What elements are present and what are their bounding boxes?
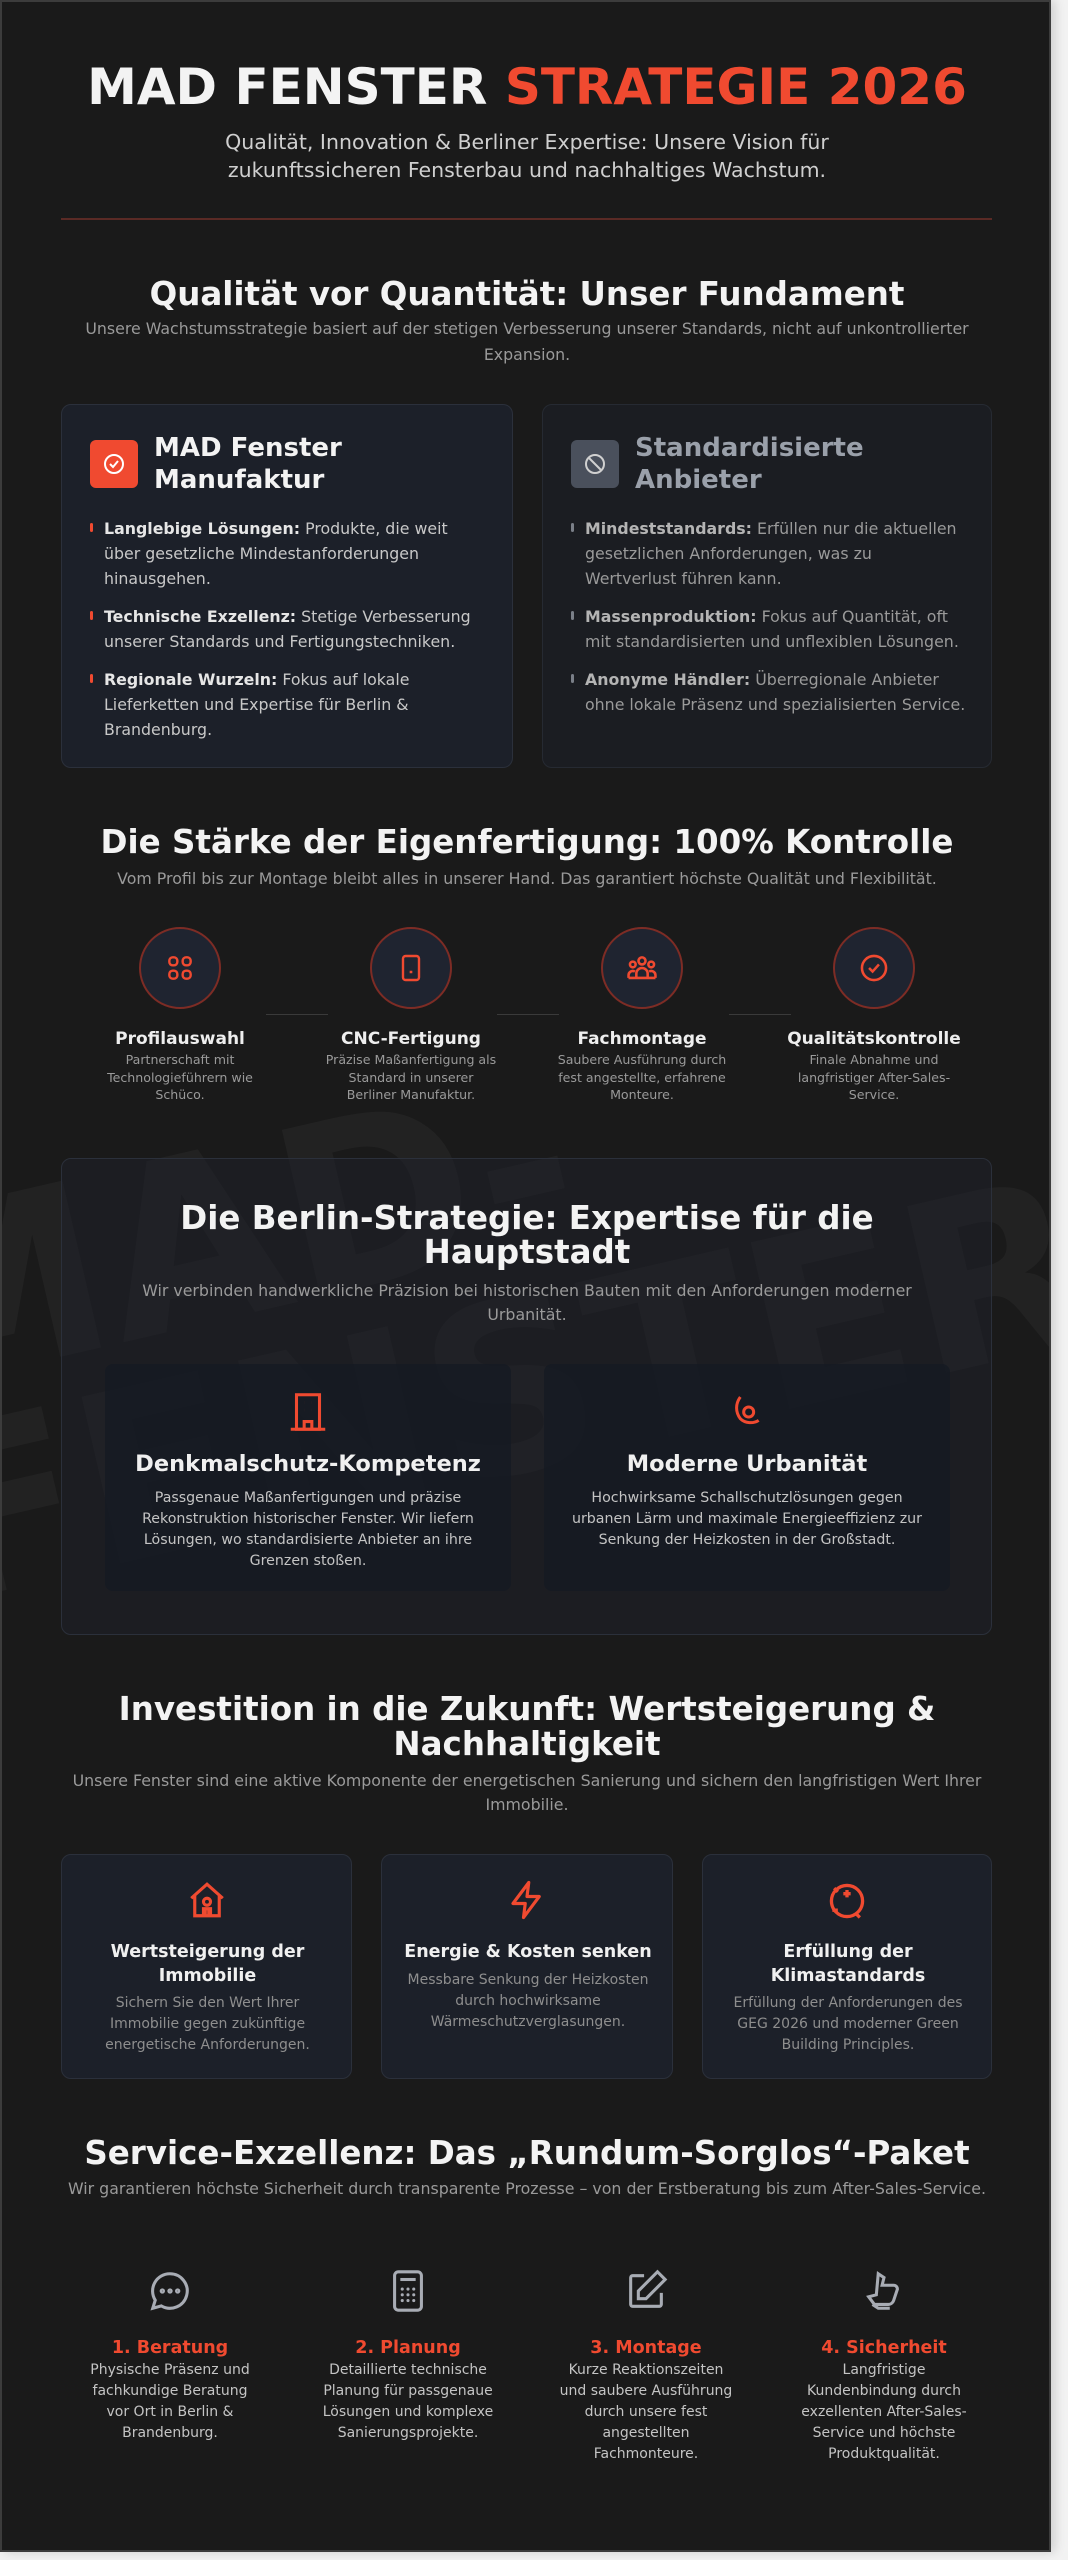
card: Moderne Urbanität <box>544 1364 950 1591</box>
bullets: Mindeststandards: Erfüllen nur die aktuellen gesetzlichen Anforderungen, was zu Wertverlust führen kann. <box>585 519 957 588</box>
card title: Anbieter <box>635 465 762 495</box>
step: Fachmontage: Saubere Ausführung durch fest angestellte, erfahrene Monteure. <box>558 1052 726 1102</box>
bullets: Anonyme Händler: Überregionale Anbieter ohne lokale Präsenz und spezialisierten Service. <box>585 670 965 714</box>
panel: MAD Fenster Manufaktur <box>61 404 513 768</box>
card title <box>154 433 342 495</box>
bullets <box>571 519 965 714</box>
icon: bolt <box>511 1880 541 1920</box>
text: section 2 intro: Vom Profil bis zur Montage bleibt alles in unserer Hand. Das garantiert höchste Qualität und Flexibilität. <box>117 869 937 888</box>
service: Montage <box>560 2270 732 2462</box>
bullets: Langlebige Lösungen: Produkte, die weit über gesetzliche Mindestanforderungen hinausgehen. <box>104 519 448 588</box>
step: Profilauswahl <box>107 927 253 1102</box>
title: MAD FENSTER STRATEGIE 2026 <box>87 58 967 116</box>
card: Wertsteigerung <box>61 1854 352 2079</box>
step: CNC-Fertigung <box>326 927 496 1102</box>
step: Profilauswahl: Profilauswahl <box>115 1029 245 1049</box>
panel: Berlin-Strategie <box>61 1158 992 1635</box>
step: Qualitätskontrolle: Qualitätskontrolle <box>787 1029 961 1049</box>
step: Profilauswahl: Partnerschaft mit Technologieführern wie Schüco. <box>107 1052 253 1102</box>
panel: Standardisierte Anbieter <box>542 404 992 768</box>
icon: chat <box>150 2272 189 2310</box>
heading: Qualität vor Quantität: Qualität vor Quantität: Unser Fundament <box>150 275 904 313</box>
icon: hand <box>866 2271 899 2310</box>
step: CNC-Fertigung: Präzise Maßanfertigung als Standard in unserer Berliner Manufaktur. <box>326 1052 496 1102</box>
icon: house <box>190 1882 224 1918</box>
card title: Standardisierte <box>635 433 864 463</box>
card: Klimastandards <box>702 1854 992 2079</box>
service: Montage: 3. Montage <box>590 2338 702 2358</box>
step: CNC-Fertigung: CNC-Fertigung <box>341 1029 481 1049</box>
icon: edit <box>629 2270 668 2308</box>
heading: Investition: Investition in die Zukunft: Wertsteigerung & Nachhaltigkeit <box>119 1690 935 1763</box>
service: Sicherheit: 4. Sicherheit <box>821 2338 947 2358</box>
service: Beratung <box>90 2272 250 2441</box>
service: Beratung: 1. Beratung <box>112 2338 228 2358</box>
text: Hochwirksame Schallschutzlösungen gegen urbanen Lärm und maximale Energieeffizienz zur Senkung der Heizkosten in der Großstadt. <box>572 1490 922 1548</box>
text: Passgenaue Maßanfertigungen und präzise Rekonstruktion historischer Fenster. Wir liefern Lösungen, wo standardisierte Anbieter an ihre Grenzen stoßen. <box>142 1490 474 1569</box>
icon: ban <box>571 440 619 488</box>
service: Planung <box>323 2270 493 2441</box>
card: Energie <box>381 1854 673 2079</box>
title: Denkmalschutz-Kompetenz <box>135 1451 481 1477</box>
service: Planung: Detaillierte technische Planung für passgenaue Lösungen und komplexe Sanierungsprojekte. <box>323 2362 493 2441</box>
service: Sicherheit <box>801 2271 967 2462</box>
title: Energie & Kosten senken <box>404 1942 652 1962</box>
heading: Service-Exzellenz: Service-Exzellenz: Das „Rundum-Sorglos“-Paket <box>84 2134 970 2172</box>
text: section 1 intro: Unsere Wachstumsstrategie basiert auf der stetigen Verbesserung unserer Standards, nicht auf unkontrollierter Expansion. <box>85 319 969 364</box>
card title: Manufaktur <box>154 465 324 495</box>
card: Denkmalschutz <box>105 1364 511 1591</box>
bullets: Technische Exzellenz: Stetige Verbesserung unserer Standards und Fertigungstechniken. <box>104 607 471 651</box>
bullets: Massenproduktion: Fokus auf Quantität, oft mit standardisierten und unflexiblen Lösungen. <box>585 607 959 651</box>
text: section 5 intro: Wir garantieren höchste Sicherheit durch transparente Prozesse – von der Erstberatung bis zum After-Sales-Service. <box>68 2179 986 2198</box>
icon: building <box>290 1393 326 1431</box>
service: Sicherheit: Langfristige Kundenbindung durch exzellenten After-Sales-Service und höchste Produktqualität. <box>801 2362 967 2462</box>
step: Qualitätskontrolle: Finale Abnahme und langfristiger After-Sales-Service. <box>798 1052 950 1102</box>
step: Fachmontage <box>558 927 726 1102</box>
step: Fachmontage: Fachmontage <box>577 1029 707 1049</box>
icon: flame <box>735 1396 760 1424</box>
icon: check <box>90 440 138 488</box>
icon: calculator <box>393 2270 423 2312</box>
title: Erfüllung der Klimastandards <box>771 1942 925 1986</box>
text: section 4 intro: Unsere Fenster sind eine aktive Komponente der energetischen Sanierung und sichern den langfristigen Wert Ihrer Immobilie. <box>73 1771 981 1814</box>
title: Wertsteigerung der Immobilie <box>111 1942 304 1986</box>
bullets <box>90 519 471 739</box>
card title <box>635 433 864 495</box>
title: Moderne Urbanität <box>627 1451 867 1477</box>
connectors <box>266 1014 328 1015</box>
heading: Die Berlin-Strategie: Expertise für die Hauptstadt <box>180 1199 874 1271</box>
intro text: Wir verbinden handwerkliche Präzision bei historischen Bauten mit den Anforderungen moderner Urbanität. <box>142 1281 912 1324</box>
bullets: Regionale Wurzeln: Fokus auf lokale Lieferketten und Expertise für Berlin & Brandenburg. <box>104 670 409 739</box>
text: Sichern Sie den Wert Ihrer Immobilie gegen zukünftige energetische Anforderungen. <box>105 1995 310 2053</box>
subtitle: Qualität, Innovation & Berliner Expertise: Unsere Vision für zukunftssicheren Fensterbau und nachhaltiges Wachstum. <box>225 130 829 182</box>
text: Erfüllung der Anforderungen des GEG 2026 und moderner Green Building Principles. <box>733 1995 963 2053</box>
service: Beratung: Physische Präsenz und fachkundige Beratung vor Ort in Berlin & Brandenburg. <box>90 2362 250 2441</box>
service: Montage: Kurze Reaktionszeiten und saubere Ausführung durch unsere fest angestellten Fachmonteure. <box>560 2362 732 2462</box>
icon: globe <box>830 1884 864 1919</box>
step: Qualitätskontrolle <box>787 927 961 1102</box>
card title: MAD Fenster <box>154 433 342 463</box>
heading: Eigenfertigung: Die Stärke der Eigenfertigung: 100% Kontrolle <box>101 823 953 861</box>
service: Planung: 2. Planung <box>355 2338 461 2358</box>
text: Messbare Senkung der Heizkosten durch hochwirksame Wärmeschutzverglasungen. <box>408 1972 648 2030</box>
